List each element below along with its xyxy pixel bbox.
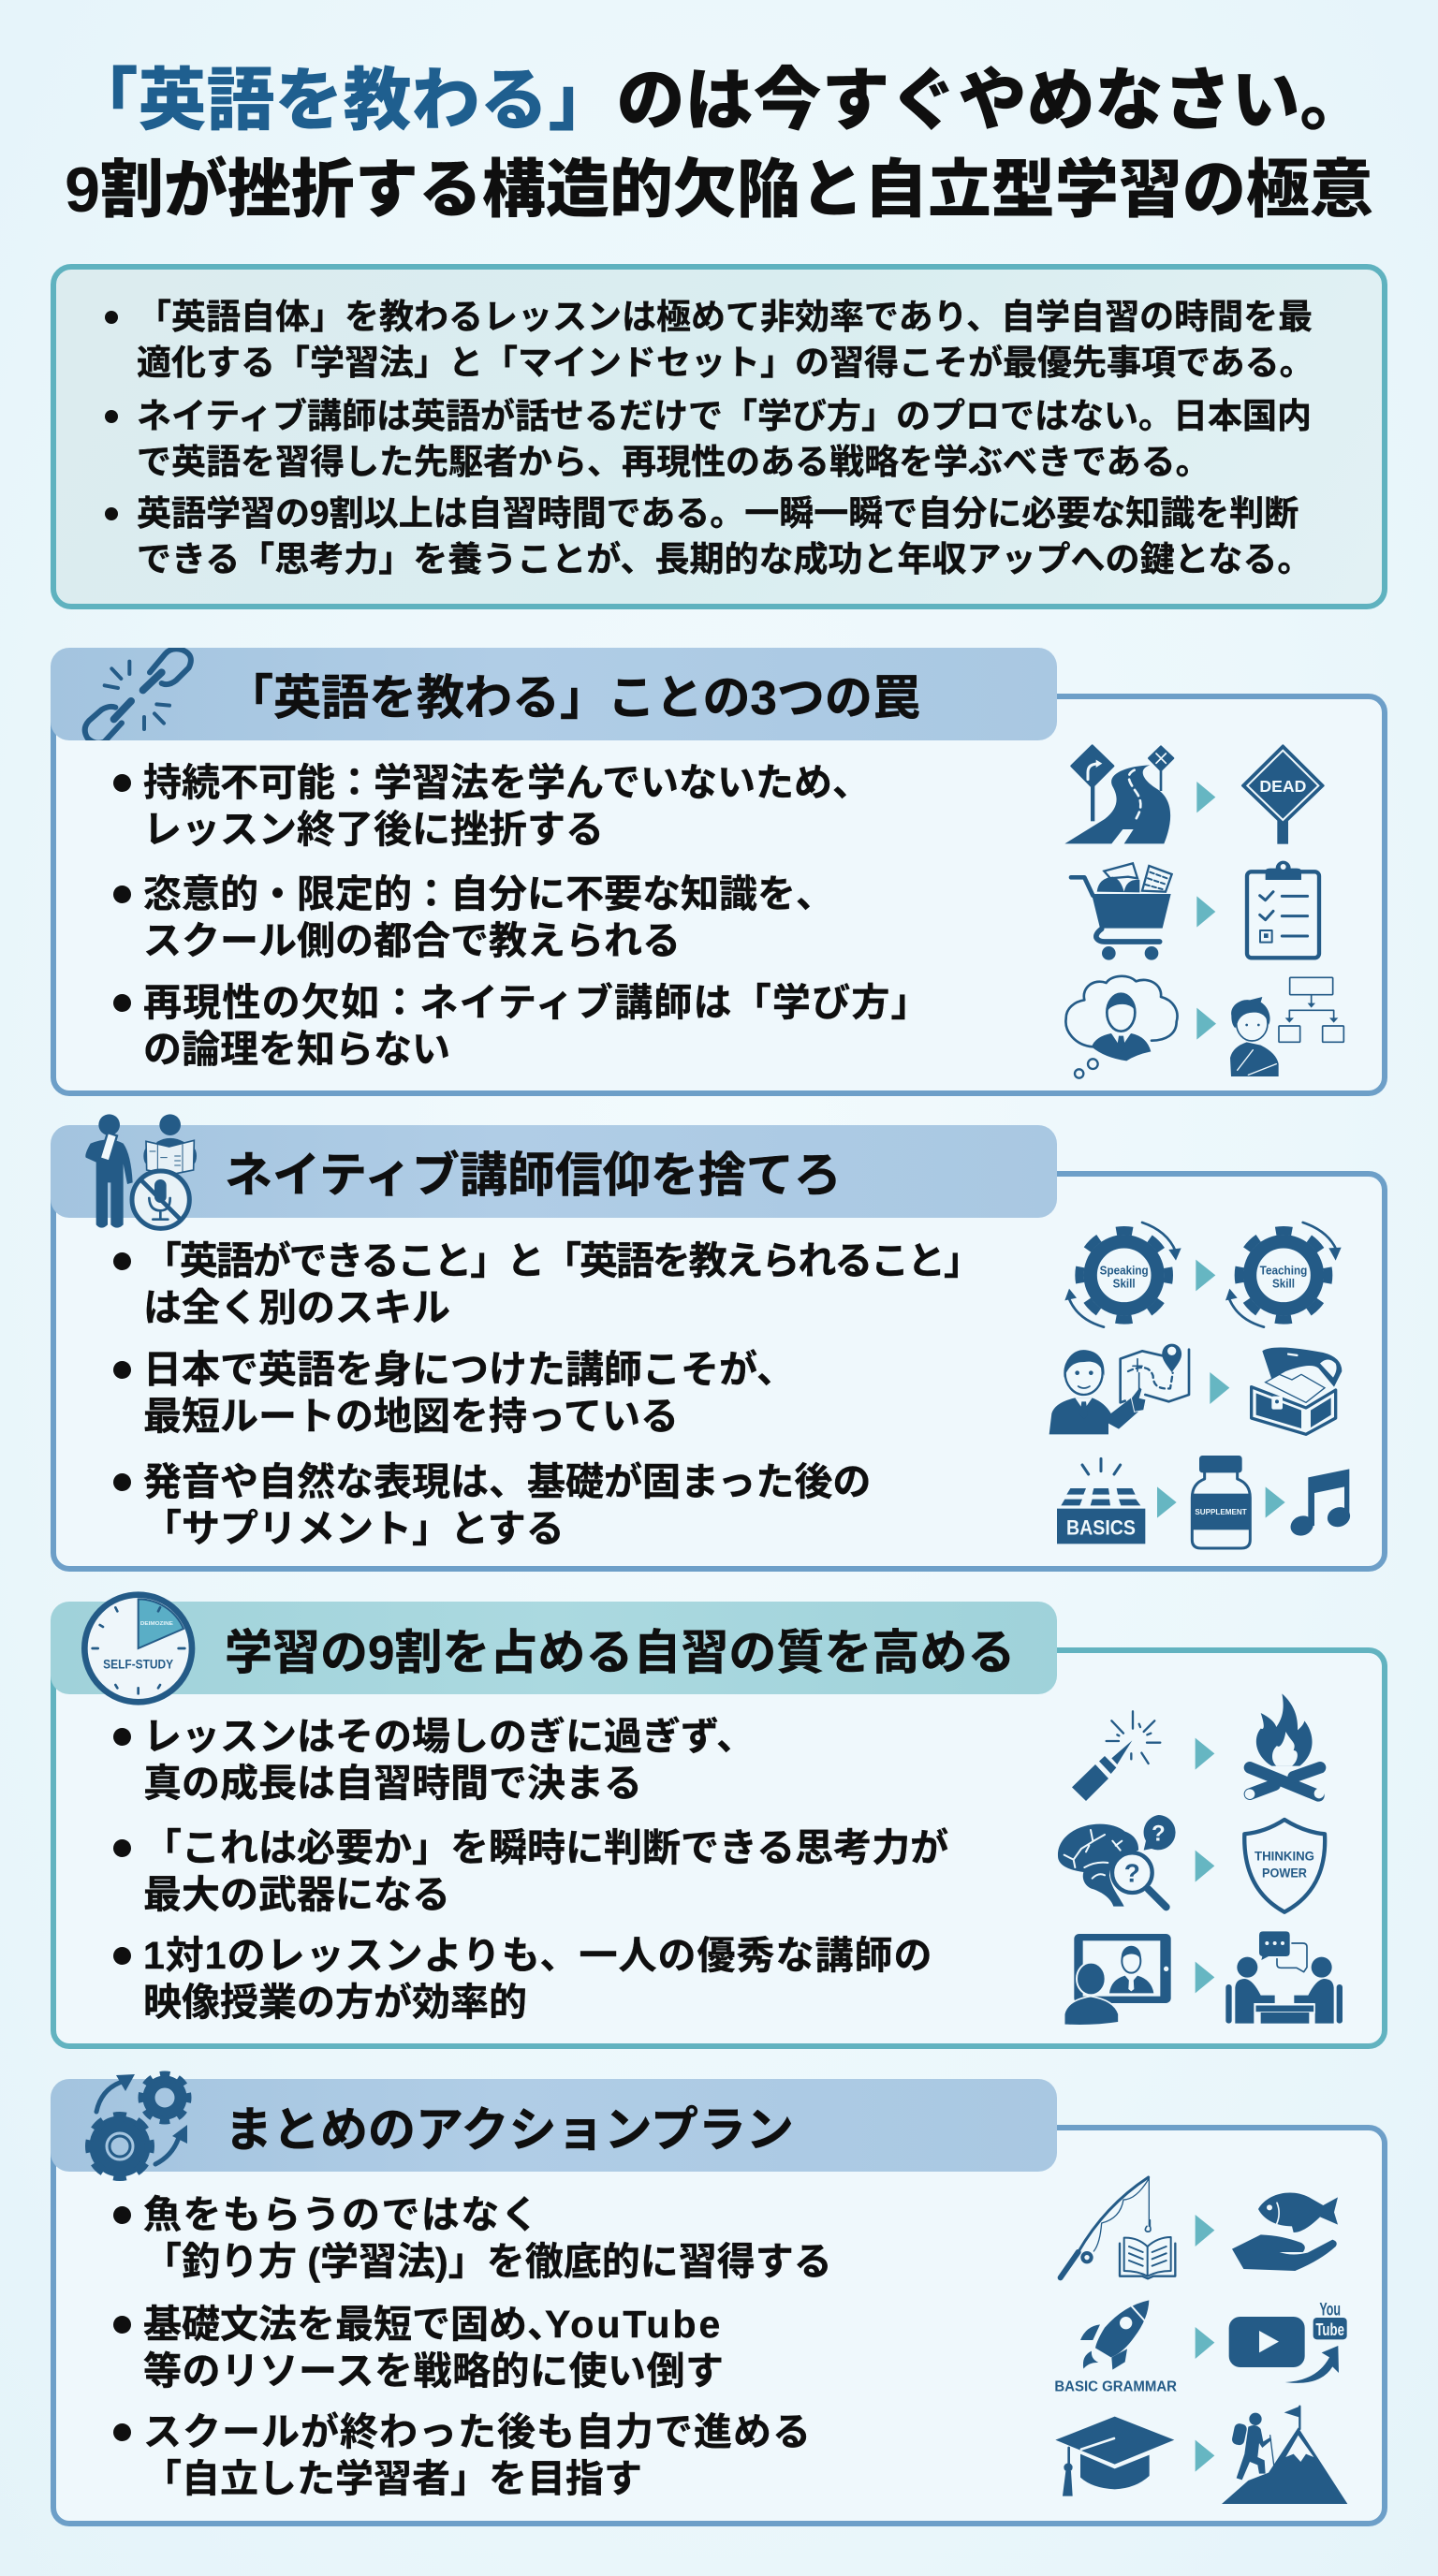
icon: basics blocks: BASICS — [1066, 1516, 1136, 1540]
icon: rocket basic grammar: BASIC GRAMMAR — [1054, 2379, 1177, 2395]
icon: self-study clock — [84, 1595, 192, 1702]
point: independent learner — [143, 2408, 812, 2502]
point: video lessons — [143, 1932, 933, 2026]
heading: self-study quality: 学習の9割を占める自習の質を高める — [225, 1626, 1015, 1679]
icon: teaching skill gear: Skill — [1272, 1277, 1295, 1290]
arrow — [1266, 1486, 1285, 1518]
point: arbitrary — [143, 871, 834, 964]
icon: video and youtube: You — [1319, 2300, 1341, 2320]
point: unsustainable: 持続不可能：学習法を学んでいないため、 — [143, 761, 871, 804]
arrow — [1157, 1486, 1177, 1518]
icon: winding road with signs — [1064, 746, 1173, 843]
icon: music note — [1288, 1469, 1353, 1539]
point: independent learner: 「自立した学習者」を目指す — [143, 2457, 642, 2500]
summary point 3: できる「思考力」を養うことが、長期的な成功と年収アップへの鍵となる。 — [137, 540, 1312, 578]
point: not reproducible — [143, 979, 931, 1073]
point: real growth — [143, 1713, 755, 1807]
arrow — [1196, 2440, 1214, 2472]
heading: self-study quality — [51, 1602, 1057, 1694]
arrow — [1196, 1008, 1216, 1040]
point: learn to fish — [143, 2191, 832, 2285]
icon: graduation cap — [1055, 2417, 1174, 2496]
point: independent learner: スクールが終わった後も自力で進める — [143, 2410, 812, 2453]
point: teachers in Japan — [143, 1346, 795, 1440]
icon: self-study clock: DEIMOZINE — [140, 1621, 173, 1627]
summary point 1: 「英語自体」を教わるレッスンは極めて非効率であり、自学自習の時間を最 — [137, 298, 1313, 336]
title: 「英語を教わる」のは今すぐやめなさい。 — [69, 63, 1369, 139]
icon: clipboard checklist — [1247, 861, 1319, 958]
icon: broken chain — [85, 649, 191, 743]
arrow — [1210, 1372, 1229, 1404]
point: arbitrary: スクール側の都合で教えられる — [143, 919, 681, 962]
icon: rocket basic grammar — [1054, 2300, 1177, 2395]
icon: dead end sign: DEAD — [1259, 777, 1307, 796]
summary point 3 — [137, 490, 1312, 582]
arrow — [1196, 1260, 1215, 1291]
summary point 1 — [137, 294, 1314, 386]
point: video lessons: 1対1のレッスンよりも、一人の優秀な講師の — [143, 1934, 933, 1977]
point: arbitrary: 恣意的・限定的：自分に不要な知識を、 — [143, 872, 834, 915]
icon: treasure chest — [1252, 1348, 1342, 1434]
icon: fishing rod and book — [1061, 2177, 1175, 2278]
point: real growth: 真の成長は自習時間で決まる — [143, 1762, 642, 1805]
icon: supplement bottle — [1192, 1456, 1250, 1548]
title: 9割が挫折する構造的欠陥と自立型学習の極意 — [65, 154, 1373, 226]
icon: native teacher thought bubble — [1065, 976, 1178, 1078]
icon: thinking person with flowchart — [1230, 977, 1343, 1076]
icon: video and youtube — [1229, 2300, 1347, 2383]
point: video lessons: 映像授業の方が効率的 — [143, 1981, 527, 2024]
point: basic grammar and youtube — [143, 2301, 724, 2394]
panel: self-study quality — [51, 1591, 1387, 2049]
icon: teaching skill gear: Teaching — [1260, 1265, 1307, 1278]
icon: match spark — [1072, 1711, 1160, 1801]
arrow — [1196, 2215, 1214, 2247]
point: not reproducible: 再現性の欠如：ネイティブ講師は「学び方」 — [143, 981, 931, 1024]
point: learn to fish: 魚をもらうのではなく — [143, 2193, 540, 2236]
arrow — [1196, 896, 1215, 928]
icon: thinking power shield — [1244, 1820, 1325, 1912]
summary point 1: 適化する「学習法」と「マインドセット」の習得こそが最優先事項である。 — [137, 344, 1314, 382]
point: real growth: レッスンはその場しのぎに過ぎず、 — [143, 1715, 755, 1758]
icon: video and youtube: Tube — [1315, 2320, 1344, 2339]
heading: action plan — [51, 2079, 1057, 2172]
heading: three traps — [51, 648, 1057, 740]
point: teachers in Japan: 日本で英語を身につけた講師こそが、 — [143, 1348, 795, 1391]
heading: three traps: 「英語を教わる」ことの3つの罠 — [226, 671, 920, 724]
icon: basics blocks — [1057, 1458, 1145, 1544]
icon: gears and arrows — [90, 2074, 187, 2176]
summary point 2: ネイティブ講師は英語が話せるだけで「学び方」のプロではない。日本国内 — [137, 397, 1312, 435]
icon: tablet video lesson — [1064, 1934, 1171, 2026]
point: basic grammar and youtube: 基礎文法を最短で固め、YouTube — [143, 2303, 723, 2346]
summary point 3: 英語学習の9割以上は自習時間である。一瞬一瞬で自分に必要な知識を判断 — [137, 494, 1299, 533]
title — [65, 63, 1373, 226]
arrow — [1196, 1962, 1214, 1993]
point: not reproducible: の論理を知らない — [143, 1028, 450, 1071]
point: thinking power: 「これは必要か」を瞬時に判断できる思考力が — [143, 1826, 948, 1869]
icon: brain with question marks: ? — [1124, 1859, 1140, 1888]
icon: supplement bottle: SUPPLEMENT — [1195, 1508, 1247, 1516]
point: different skills: は全く別のスキル — [143, 1286, 450, 1329]
panel: action plan — [51, 2071, 1387, 2526]
point: unsustainable: レッスン終了後に挫折する — [143, 808, 604, 851]
heading: native teacher belief: ネイティブ講師信仰を捨てろ — [225, 1149, 842, 1202]
icon: one-on-one meeting — [1225, 1931, 1343, 2024]
heading: native teacher belief — [51, 1125, 1057, 1218]
icon: brain with question marks: ? — [1152, 1822, 1166, 1847]
panel: three traps — [51, 648, 1387, 1096]
summary point 2: で英語を習得した先駆者から、再現性のある戦略を学ぶべきである。 — [137, 443, 1211, 481]
icon: teacher pointing at route map — [1049, 1344, 1189, 1434]
icon: thinking power shield: THINKING — [1255, 1848, 1314, 1863]
point: learn to fish: 「釣り方 (学習法)」を徹底的に習得する — [143, 2240, 832, 2283]
icon: people with no-speaking sign — [85, 1114, 197, 1228]
icon: campfire — [1245, 1693, 1324, 1799]
panel: abandon native teacher belief — [51, 1114, 1387, 1572]
icon: speaking skill gear: Skill — [1113, 1277, 1136, 1290]
point: thinking power: 最大の武器になる — [143, 1873, 450, 1916]
arrow — [1196, 782, 1215, 812]
icon: dead end sign — [1242, 746, 1323, 844]
panel: summary — [51, 264, 1387, 609]
point: teachers in Japan: 最短ルートの地図を持っている — [143, 1395, 679, 1438]
icon: fish on hand — [1232, 2192, 1338, 2271]
arrow — [1196, 1738, 1214, 1770]
icon: climber and mountain — [1222, 2407, 1347, 2504]
summary point 2 — [137, 393, 1312, 485]
point: basic grammar and youtube: 等のリソースを戦略的に使い倒す — [143, 2349, 724, 2393]
point: different skills: 「英語ができること」と「英語を教えられること」 — [143, 1239, 980, 1282]
icon: thinking power shield: POWER — [1262, 1865, 1307, 1880]
icon: speaking skill gear: Speaking — [1100, 1265, 1149, 1278]
point: supplement: 「サプリメント」とする — [143, 1507, 565, 1550]
arrow — [1196, 1851, 1214, 1882]
arrow — [1196, 2327, 1214, 2359]
point: supplement — [143, 1458, 871, 1552]
point: thinking power — [143, 1824, 948, 1918]
point: different skills — [143, 1237, 980, 1331]
point: supplement: 発音や自然な表現は、基礎が固まった後の — [143, 1460, 871, 1503]
icon: teaching skill gear — [1225, 1222, 1342, 1327]
point: unsustainable — [143, 759, 871, 853]
icon: speaking skill gear — [1064, 1222, 1181, 1327]
icon: self-study clock: SELF-STUDY — [103, 1657, 174, 1672]
icon: brain with question marks — [1058, 1815, 1176, 1907]
icon: shopping cart — [1071, 863, 1172, 960]
heading: action plan: まとめのアクションプラン — [225, 2103, 794, 2157]
